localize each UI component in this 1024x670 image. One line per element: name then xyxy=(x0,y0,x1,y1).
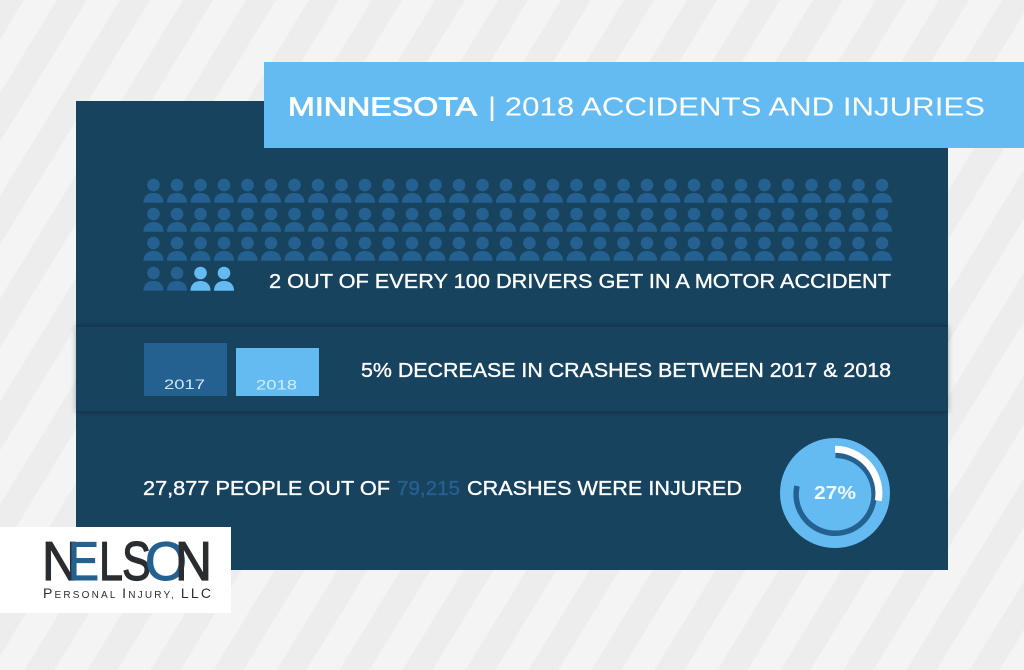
bar 2018 xyxy=(236,348,319,396)
person rows xyxy=(144,179,892,291)
statistic: injured xyxy=(143,478,742,500)
statistic: injured: 27,877 PEOPLE OUT OF xyxy=(143,478,390,500)
panel: year comparison band xyxy=(76,326,948,412)
statistic: injured: CRASHES WERE INJURED xyxy=(467,478,742,500)
donut chart: 27% xyxy=(780,438,890,548)
main panel xyxy=(76,101,948,570)
pictogram: 100 drivers xyxy=(144,179,892,291)
statistic: 5% decrease: 5% DECREASE IN CRASHES BETWEEN 2017 & 2018 xyxy=(361,360,891,382)
logo wordmark: E xyxy=(68,531,99,592)
title bar xyxy=(264,62,1024,148)
statistic: injured: 79,215 xyxy=(397,478,460,500)
title: subtitle: | 2018 ACCIDENTS AND INJURIES xyxy=(488,92,985,122)
logo wordmark: O xyxy=(145,531,187,592)
bar 2018: 2018 xyxy=(256,378,297,392)
statistic: 2 out of 100: 2 OUT OF EVERY 100 DRIVERS GET IN A MOTOR ACCIDENT xyxy=(269,271,891,293)
logo: Nelson Personal Injury xyxy=(0,527,231,613)
logo wordmark: N xyxy=(175,531,212,592)
logo tagline: PERSONAL INJURY, LLC xyxy=(43,585,211,601)
logo wordmark: S xyxy=(122,531,151,592)
donut chart: 27%: 27% xyxy=(814,483,856,503)
logo wordmark: L xyxy=(99,531,123,592)
highlighted persons xyxy=(190,267,234,291)
bar 2017: 2017 xyxy=(164,377,205,392)
bar 2017 xyxy=(144,343,227,396)
title: Minnesota: MINNESOTA xyxy=(288,92,478,122)
logo wordmark: N xyxy=(42,531,79,592)
logo wordmark xyxy=(42,531,212,592)
